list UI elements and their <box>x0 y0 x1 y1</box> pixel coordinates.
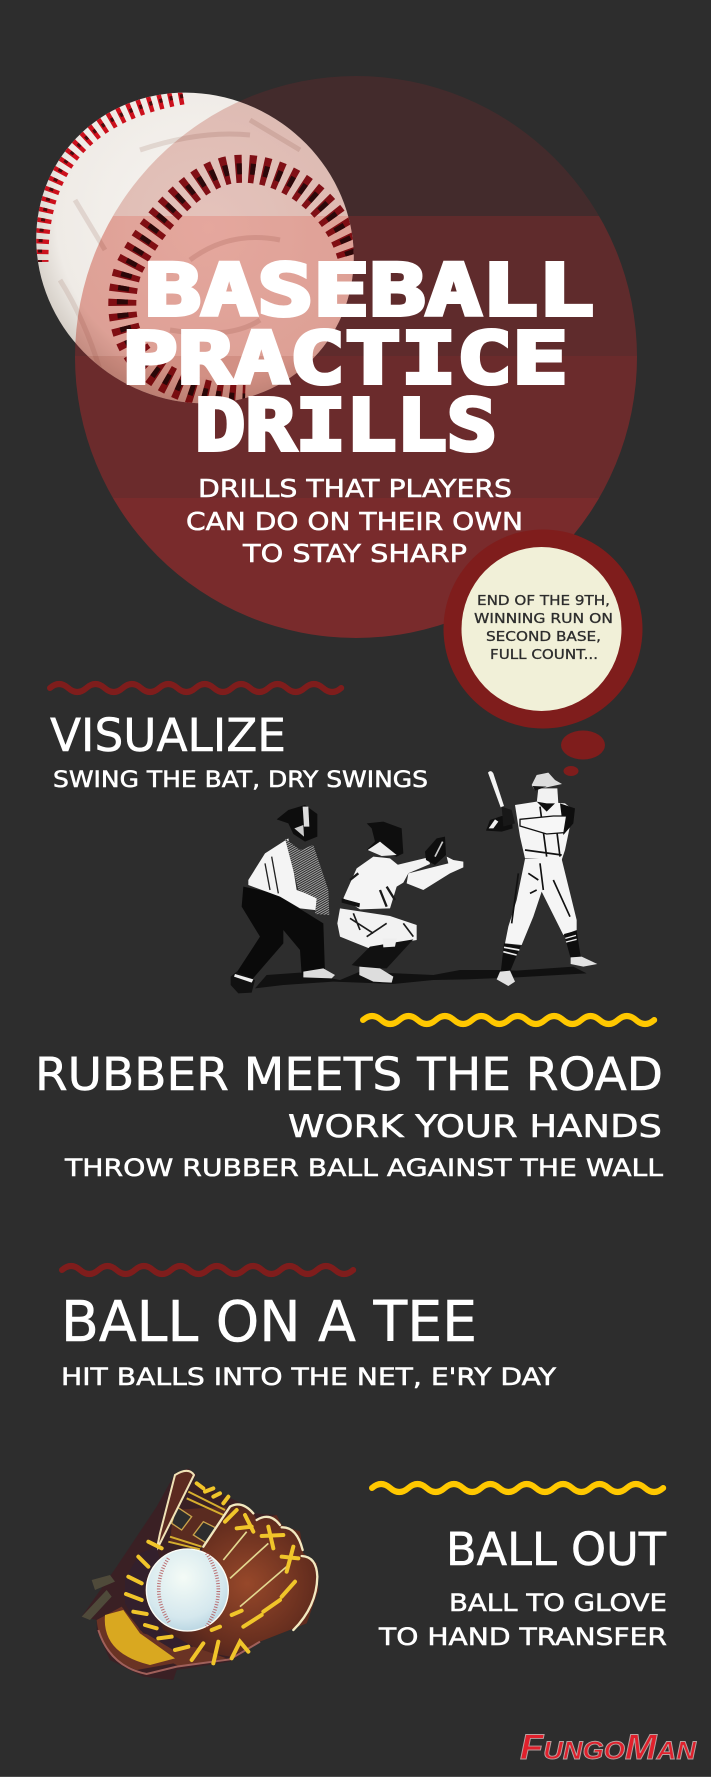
ground shadow <box>255 967 587 988</box>
rubber meets the road section: WORK YOUR HANDS <box>288 1109 662 1145</box>
title <box>122 249 594 467</box>
ball out section: BALL TO GLOVE <box>449 1589 667 1617</box>
title: PRACTICE <box>122 317 568 400</box>
ball on a tee section <box>61 1290 556 1391</box>
umpire <box>231 805 335 993</box>
baseball <box>36 92 354 404</box>
bottom edge line <box>0 1776 711 1777</box>
wavy divider: visualize <box>50 684 341 692</box>
wavy divider: ball on a tee <box>62 1266 353 1274</box>
thought bubble: WINNING RUN ON <box>474 611 613 627</box>
catcher <box>337 822 463 983</box>
rubber meets the road section: RUBBER MEETS THE ROAD <box>35 1048 663 1101</box>
title: DRILLS <box>195 384 497 467</box>
ball out section: TO HAND TRANSFER <box>378 1623 667 1651</box>
ball out section <box>378 1523 667 1651</box>
illustration: umpire, catcher and batter <box>231 771 597 993</box>
icon: baseball glove <box>82 1468 318 1680</box>
subtitle <box>186 474 523 568</box>
batter <box>486 771 597 986</box>
subtitle: DRILLS THAT PLAYERS <box>198 474 512 503</box>
subtitle: TO STAY SHARP <box>242 539 467 568</box>
subtitle: CAN DO ON THEIR OWN <box>186 507 523 536</box>
rubber meets the road section <box>35 1048 664 1182</box>
thought bubble <box>444 530 642 776</box>
ball on a tee section: HIT BALLS INTO THE NET, E'RY DAY <box>61 1363 556 1391</box>
title: BASEBALL <box>145 249 594 332</box>
thought bubble: SECOND BASE, <box>486 629 601 645</box>
logo: FungoMan: FUNGOMAN <box>520 1728 697 1767</box>
ball out section: BALL OUT <box>446 1523 667 1576</box>
thought bubble: FULL COUNT... <box>490 647 598 663</box>
visualize section <box>50 709 428 793</box>
ball on a tee section: BALL ON A TEE <box>61 1290 477 1355</box>
visualize section: VISUALIZE <box>50 709 286 762</box>
thought bubble: END OF THE 9TH, <box>477 593 610 609</box>
wavy divider: ball out <box>372 1484 663 1492</box>
visualize section: SWING THE BAT, DRY SWINGS <box>53 768 428 793</box>
rubber meets the road section: THROW RUBBER BALL AGAINST THE WALL <box>64 1154 664 1182</box>
big banded circle <box>70 70 645 643</box>
wavy divider: rubber meets the road <box>363 1016 654 1024</box>
baseball tint where the circle overlaps <box>75 102 354 404</box>
